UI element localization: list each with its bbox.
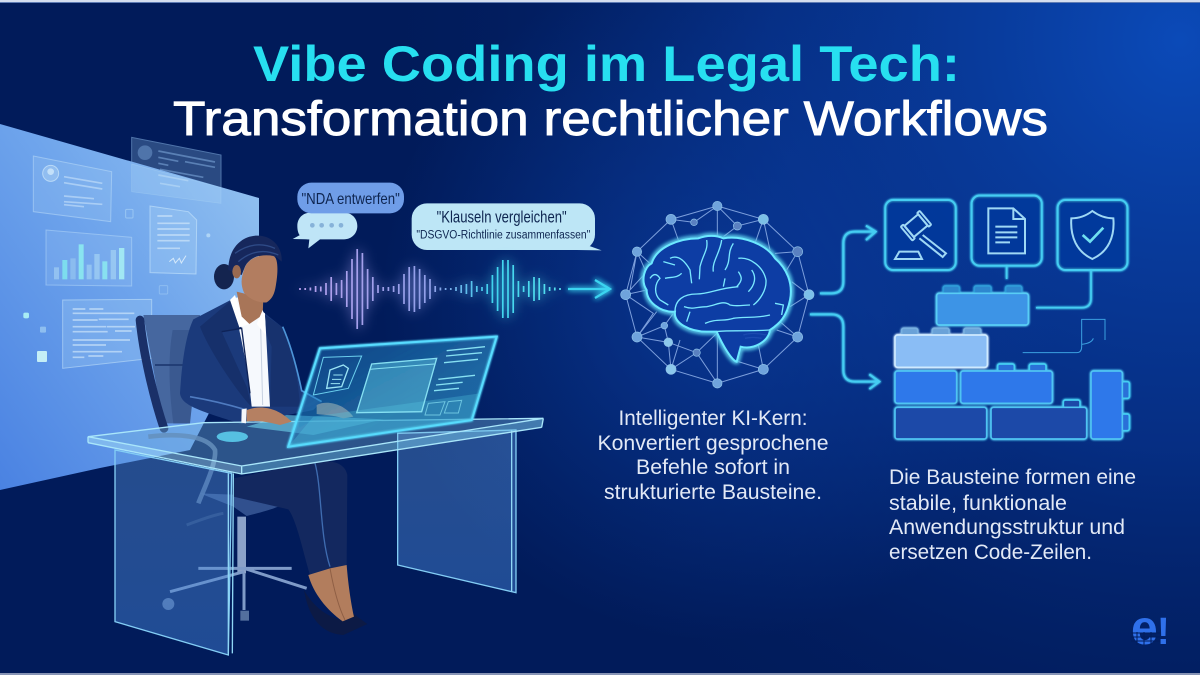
illustration: lawyer at glass desk xyxy=(140,236,367,635)
voice waveform xyxy=(300,249,560,329)
text: building blocks description: ersetzen Code-Zeilen. xyxy=(889,541,1092,564)
text: intelligent AI core: Konvertiert gesprochene xyxy=(598,432,828,455)
text: intelligent AI core: Intelligenter KI-Kern: xyxy=(618,407,808,430)
building blocks xyxy=(895,286,1129,439)
text: building blocks description: Die Bausteine formen eine xyxy=(889,466,1136,489)
speech bubbles xyxy=(293,183,602,250)
icon: document xyxy=(972,196,1042,266)
wall surface xyxy=(0,124,259,490)
bubble: clauses: "DSGVO-Richtlinie zusammenfassen" xyxy=(416,227,590,241)
text: intelligent AI core: Befehle sofort in xyxy=(636,456,790,479)
desk top xyxy=(88,418,543,474)
panel: legal icons and building blocks xyxy=(810,196,1129,439)
left desk panel xyxy=(115,450,232,655)
holographic screen xyxy=(288,337,497,447)
text: building blocks description xyxy=(889,466,1136,564)
keyboard xyxy=(247,415,383,435)
title xyxy=(173,36,1048,146)
arrow: voice to brain xyxy=(568,280,610,298)
icon: AI brain with network xyxy=(621,201,814,388)
glass desk xyxy=(88,337,543,655)
chair xyxy=(140,315,307,621)
head xyxy=(214,236,282,303)
title: Vibe Coding im Legal Tech: xyxy=(253,36,960,92)
panel: holographic wall with documents xyxy=(0,124,259,490)
brain xyxy=(644,236,791,362)
text: building blocks description: Anwendungsstruktur und xyxy=(889,516,1125,539)
bubble: typing xyxy=(293,213,357,248)
icon: shield xyxy=(1058,200,1127,270)
bubble: clauses: "Klauseln vergleichen" xyxy=(437,208,567,227)
back profile card xyxy=(132,137,221,203)
connectors xyxy=(1007,266,1091,308)
right desk panel xyxy=(398,430,516,593)
mouse xyxy=(217,431,248,442)
logo: e xyxy=(1131,602,1158,655)
arrows from brain xyxy=(810,226,879,389)
text: building blocks description: stabile, funktionale xyxy=(889,492,1067,515)
icon: gavel xyxy=(885,200,956,270)
torso with blazer xyxy=(180,292,322,424)
neural network xyxy=(621,201,814,388)
bubble: NDA: "NDA entwerfen" xyxy=(301,191,400,208)
logo: ! xyxy=(1157,611,1170,653)
logo xyxy=(1131,602,1170,655)
legs and shoes xyxy=(233,461,367,635)
text: intelligent AI core xyxy=(598,407,828,504)
hands xyxy=(241,403,353,425)
title: Transformation rechtlicher Workflows xyxy=(173,93,1048,146)
bubble: NDA xyxy=(297,183,404,213)
wall cards xyxy=(23,156,221,368)
bubble: clauses xyxy=(412,203,602,250)
text: intelligent AI core: strukturierte Bausteine. xyxy=(604,481,822,504)
